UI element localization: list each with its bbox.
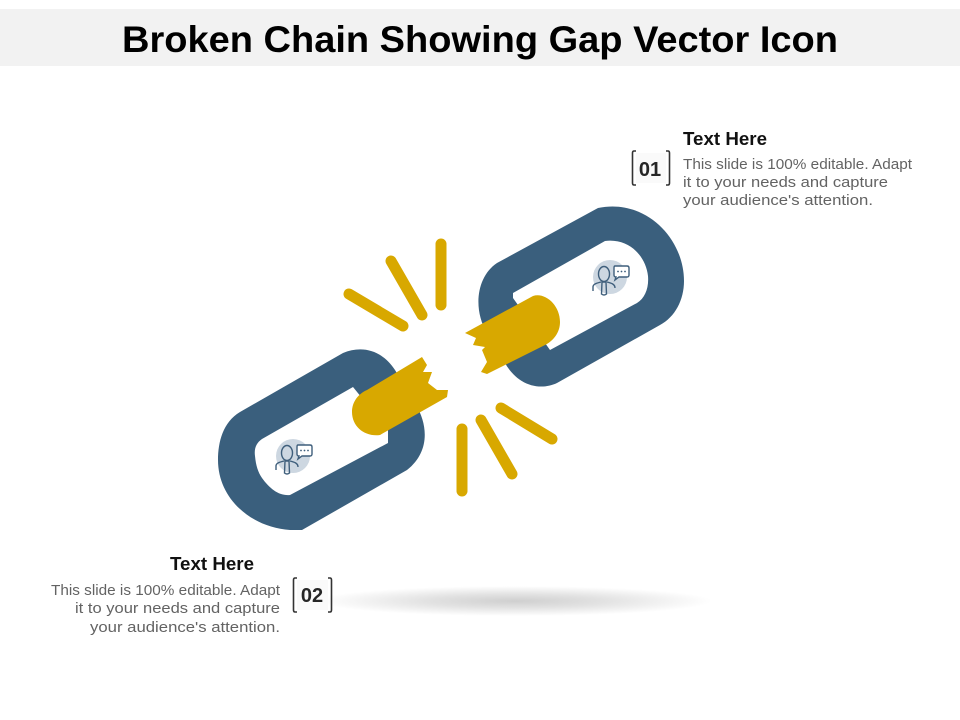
right broken gold stub (465, 295, 560, 374)
text block 01: This slide is 100% editable. Adapt (683, 157, 912, 173)
left broken gold stub (352, 357, 448, 435)
text block 01: Text Here (683, 129, 767, 149)
right chain link (478, 206, 684, 387)
title: Broken Chain Showing Gap Vector Icon (122, 19, 838, 60)
ground shadow (318, 586, 712, 616)
number badge 02 (294, 578, 332, 612)
text block 02 (51, 554, 280, 636)
text block 01: it to your needs and capture (683, 175, 888, 191)
break rays, upper (349, 244, 441, 326)
break rays, lower (462, 408, 552, 491)
text block 01: your audience's attention. (683, 193, 873, 209)
number badge 01 (632, 151, 670, 185)
icon: person with speech bubble, left link (276, 439, 312, 474)
title (0, 9, 960, 66)
number badge 01: 01 (639, 159, 661, 181)
icon: person with speech bubble, right link (593, 260, 629, 295)
text block 02: your audience's attention. (90, 620, 280, 636)
text block 02: Text Here (170, 554, 254, 574)
text block 02: it to your needs and capture (75, 601, 280, 617)
number badge 02: 02 (301, 585, 323, 607)
text block 02: This slide is 100% editable. Adapt (51, 583, 280, 599)
left chain link (218, 349, 425, 530)
text block 01 (683, 129, 912, 209)
